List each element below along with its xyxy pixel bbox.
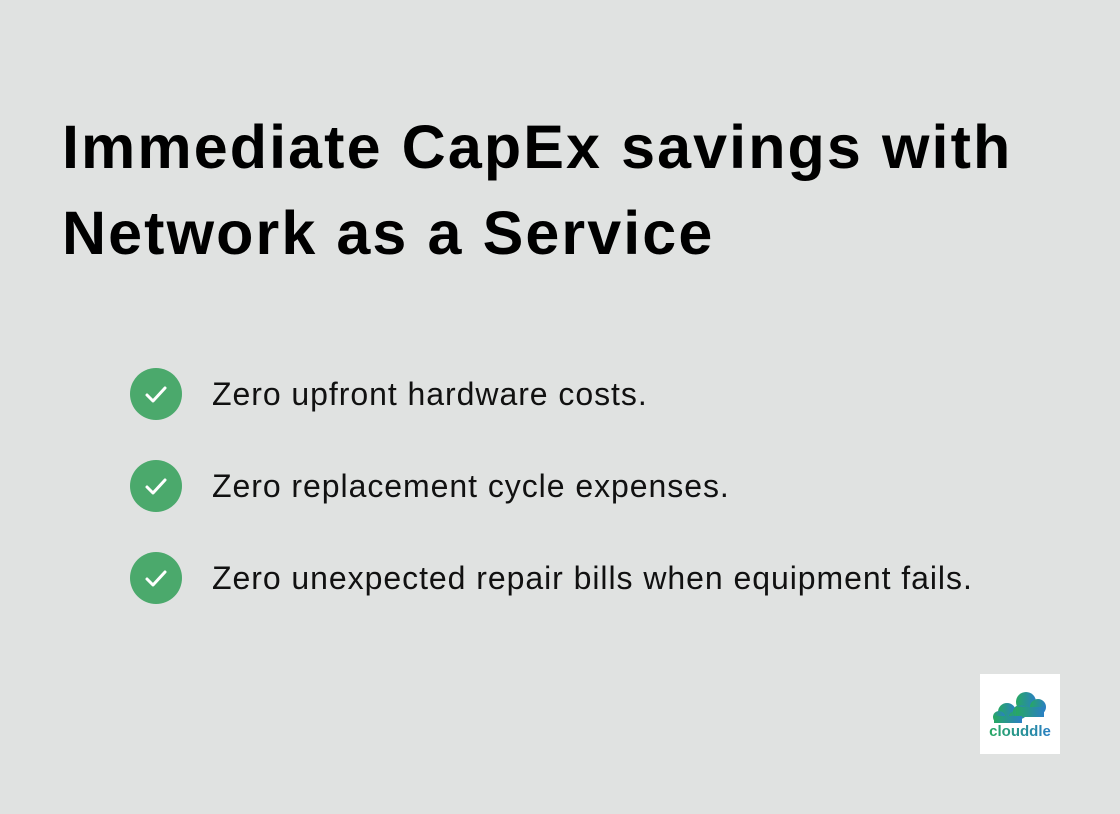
title xyxy=(62,113,1012,267)
icon: check xyxy=(130,552,182,604)
bullet 1 xyxy=(130,368,648,420)
title: Immediate CapEx savings with xyxy=(62,113,1012,181)
icon: check xyxy=(130,460,182,512)
bullet 2: Zero replacement cycle expenses. xyxy=(212,468,730,504)
logo xyxy=(980,674,1060,754)
bullet 1: Zero upfront hardware costs. xyxy=(212,376,648,412)
bullet 3: Zero unexpected repair bills when equipment fails. xyxy=(212,560,973,596)
bullet 2 xyxy=(130,460,730,512)
logo: clouddle xyxy=(989,723,1051,740)
title: Network as a Service xyxy=(62,199,714,267)
icon: check xyxy=(130,368,182,420)
bullet 3 xyxy=(130,552,973,604)
